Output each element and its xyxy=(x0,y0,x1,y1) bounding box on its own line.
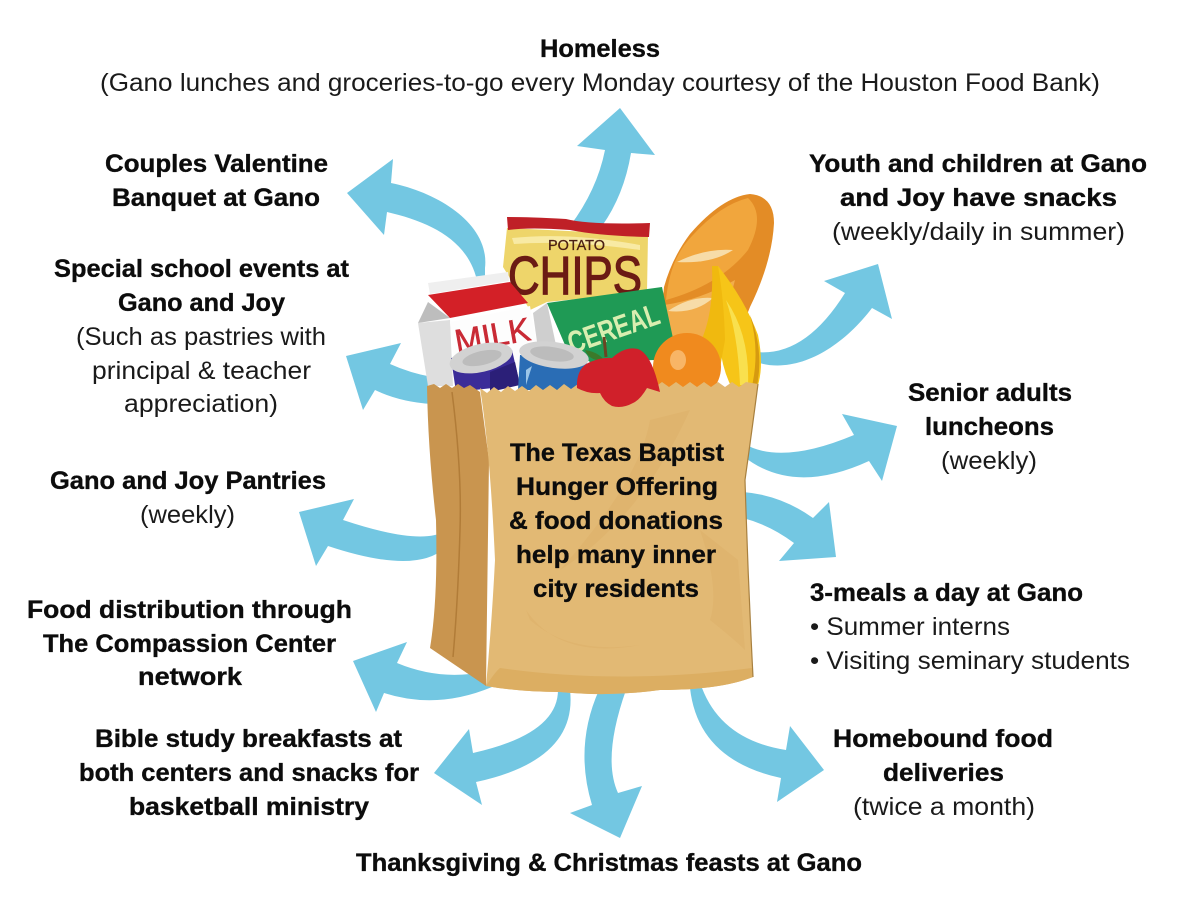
arrow: to Homebound deliveries xyxy=(690,688,824,802)
arrow: to Couples Valentine Banquet xyxy=(347,159,485,285)
potato chips bag: CHIPS xyxy=(508,246,642,306)
label: Bible study breakfasts: both centers and snacks for xyxy=(79,759,419,787)
label: 3-meals a day xyxy=(810,579,1130,675)
label: Homebound food deliveries: (twice a month) xyxy=(853,793,1035,821)
label: Youth and children xyxy=(809,150,1147,246)
milk carton xyxy=(418,272,537,386)
label: Youth and children: (weekly/daily in summer) xyxy=(832,218,1125,246)
label: Senior adults luncheons xyxy=(908,379,1072,475)
label: Couples Valentine Banquet xyxy=(105,150,328,212)
blue can xyxy=(518,337,590,390)
bag front panel xyxy=(480,382,758,694)
label: Gano and Joy Pantries: Gano and Joy Pantries xyxy=(50,467,326,495)
label: Special school events: appreciation) xyxy=(124,390,278,418)
label: Homeless: (Gano lunches and groceries-to-go every Monday courtesy of the Houston Food Bank) xyxy=(100,69,1100,97)
potato chips bag: POTATO xyxy=(548,237,605,254)
label: Food distribution: network xyxy=(138,663,242,691)
bag caption xyxy=(509,439,725,603)
label: Bible study breakfasts: basketball ministry xyxy=(129,793,369,821)
label: 3-meals a day: • Visiting seminary students xyxy=(810,647,1130,675)
label: Bible study breakfasts: Bible study breakfasts at xyxy=(95,725,403,753)
arrow: to Thanksgiving and Christmas feasts xyxy=(570,690,642,838)
label: Homebound food deliveries: Homebound food xyxy=(833,725,1053,753)
label: Homeless: Homeless xyxy=(540,35,660,63)
label: Food distribution: Food distribution through xyxy=(27,596,352,624)
arrow: to 3-meals a day xyxy=(743,492,836,561)
label: Couples Valentine Banquet: Couples Valentine xyxy=(105,150,328,178)
bag caption: & food donations xyxy=(509,507,723,535)
label: Food distribution xyxy=(27,596,352,691)
label: Couples Valentine Banquet: Banquet at Gano xyxy=(112,184,320,212)
label: Homebound food deliveries: deliveries xyxy=(883,759,1004,787)
bag caption: city residents xyxy=(533,575,699,603)
groceries xyxy=(418,194,774,401)
arrow: to Special school events xyxy=(346,343,432,410)
label: Special school events: Gano and Joy xyxy=(118,289,285,317)
label: 3-meals a day: 3-meals a day at Gano xyxy=(810,579,1083,607)
label: Senior adults luncheons: (weekly) xyxy=(941,447,1037,475)
bag fold line xyxy=(452,392,460,657)
label: Youth and children: and Joy have snacks xyxy=(840,184,1117,212)
bag side panel xyxy=(427,384,489,686)
paper bag xyxy=(427,382,758,694)
arrow: to Senior adults luncheons xyxy=(743,414,897,481)
milk carton: MILK xyxy=(452,310,533,360)
label: Special school events: principal & teacher xyxy=(92,357,311,385)
label: Gano and Joy Pantries: (weekly) xyxy=(140,501,235,529)
bag right edge xyxy=(745,384,758,677)
arrow: to Bible study breakfasts xyxy=(434,690,571,805)
label: Special school events: (Such as pastries with xyxy=(76,323,326,351)
bag caption: help many inner xyxy=(516,541,716,569)
apple xyxy=(577,337,660,407)
cereal box: CEREAL xyxy=(563,297,664,361)
orange xyxy=(653,333,721,401)
label: Food distribution: The Compassion Center xyxy=(43,630,336,658)
label: Bible study breakfasts xyxy=(79,725,419,821)
label: Special school events: Special school events at xyxy=(54,255,350,283)
label: 3-meals a day: • Summer interns xyxy=(810,613,1010,641)
arrow: to Homeless xyxy=(570,108,655,226)
arrow: to Compassion Center network xyxy=(353,642,492,712)
label: Special school events xyxy=(54,255,350,418)
label: Senior adults luncheons: Senior adults xyxy=(908,379,1072,407)
label: Homebound food deliveries xyxy=(833,725,1053,821)
bag caption: Hunger Offering xyxy=(516,473,718,501)
bag caption: The Texas Baptist xyxy=(510,439,725,467)
bag creases xyxy=(526,410,745,650)
purple can xyxy=(447,337,520,392)
potato chips bag xyxy=(503,217,650,310)
arrow: to Pantries xyxy=(299,499,445,566)
bananas xyxy=(700,266,761,390)
bag bottom shadow xyxy=(486,668,753,694)
label: Senior adults luncheons: luncheons xyxy=(925,413,1054,441)
label: Gano and Joy Pantries xyxy=(50,467,326,529)
label: Thanksgiving and Christmas feasts: Thanksgiving & Christmas feasts at Gano xyxy=(356,849,862,877)
label: Homeless xyxy=(100,35,1100,97)
cereal box xyxy=(533,287,674,362)
arrow: to Youth and children snacks xyxy=(756,264,892,365)
label: Youth and children: Youth and children at Gano xyxy=(809,150,1147,178)
bread loaf xyxy=(663,194,774,345)
arrows radiating from the bag xyxy=(299,108,897,838)
